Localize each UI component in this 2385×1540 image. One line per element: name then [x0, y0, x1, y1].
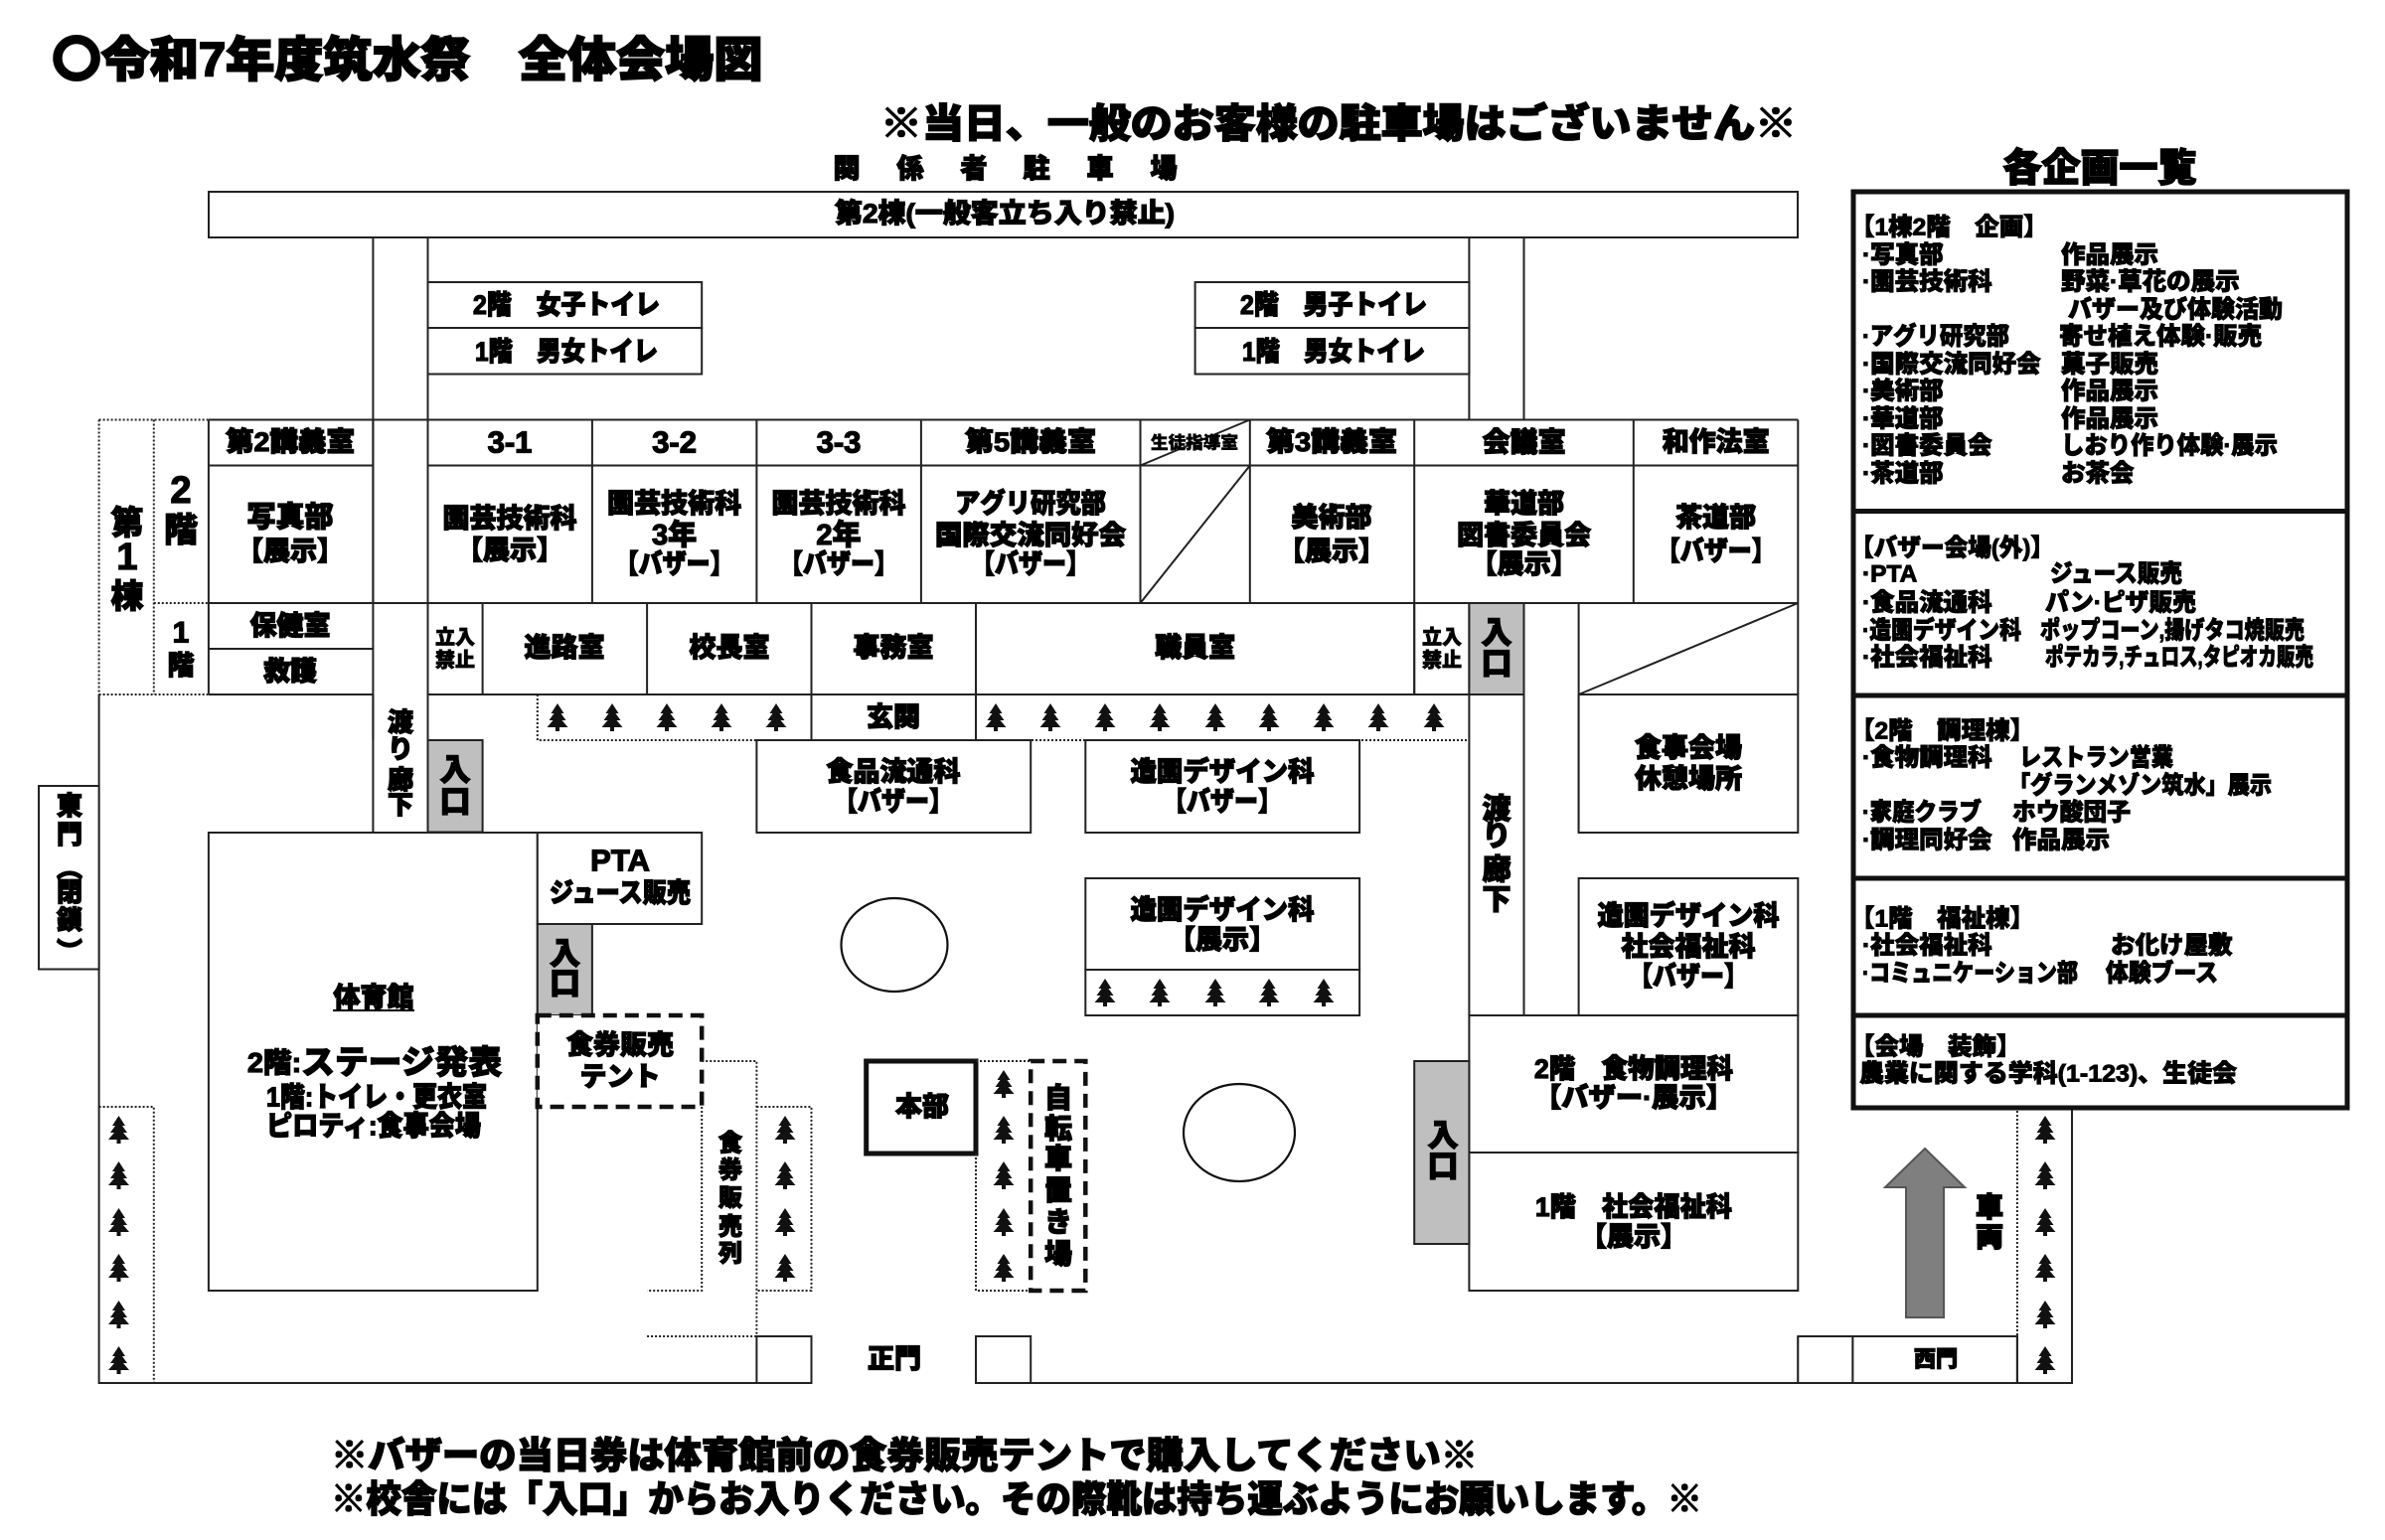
first floor rooms: 禁止 [435, 648, 475, 672]
dining area: 食事会場 [1635, 733, 1742, 763]
second floor rooms: 【バザー】 [971, 549, 1090, 579]
east gate: 東 [57, 791, 82, 821]
section: building 1 floor 2: ·国際交流同好会 [1862, 350, 2041, 378]
headquarters: 本部 [895, 1092, 949, 1122]
design and welfare bazaar: 【バザー】 [1629, 962, 1748, 992]
dining area: 休憩場所 [1635, 764, 1742, 794]
entrance: gym north: 入 [439, 753, 471, 787]
section: outdoor bazaar: ·PTA [1862, 560, 1918, 588]
trees near bicycle parking [976, 1061, 1031, 1291]
entrance: gym east: 入 [550, 936, 580, 972]
east gate: 鎖 [57, 905, 82, 935]
second floor rooms: 【展示】 [1278, 537, 1385, 566]
bicycle parking: き [1044, 1206, 1072, 1238]
second floor rooms: 【バザー】 [615, 549, 734, 579]
section: building 1 floor 2: ·アグリ研究部 [1862, 322, 2009, 350]
landscape design exhibit [1085, 878, 1359, 1015]
food distribution bazaar [756, 740, 1031, 833]
second floor rooms: 茶道部 [1675, 503, 1756, 533]
second floor rooms: 会議室 [1483, 427, 1566, 457]
vehicle label: 両 [1976, 1222, 2003, 1252]
vehicle label: 車 [1976, 1192, 2003, 1222]
building 1 outline labels: 1 [116, 537, 138, 578]
bicycle parking: 転 [1044, 1113, 1072, 1145]
section: cooking building: ホウ酸団子 [2012, 799, 2131, 827]
toilets left: 1階 男女トイレ [475, 337, 658, 367]
vehicle label [1976, 1192, 2003, 1252]
meal ticket tent: 食券販売 [566, 1030, 674, 1060]
ticket queue: 販 [718, 1184, 742, 1212]
building 1 outline labels: 第 [111, 505, 143, 540]
section: cooking building: ·家庭クラブ [1862, 797, 1982, 827]
food distribution bazaar: 【バザー】 [834, 787, 953, 817]
section: building 1 floor 2: 作品展示 [2061, 405, 2158, 433]
section: outdoor bazaar: ポップコーン,揚げタコ焼販売 [2040, 616, 2305, 644]
second floor rooms: 3-1 [488, 425, 532, 459]
gymnasium: 2階:ステージ発表 [247, 1043, 502, 1081]
site boundary [99, 694, 2072, 1383]
entrance: gym east [538, 924, 592, 1015]
entrance: gym east: 口 [550, 966, 580, 1001]
section: building 1 floor 2: しおり作り体験·展示 [2061, 431, 2278, 459]
section: welfare building: お化け屋敷 [2111, 930, 2233, 960]
second floor rooms: 華道部 [1484, 489, 1564, 519]
entrance: gym north [427, 740, 483, 833]
PTA booth: ジュース販売 [550, 878, 691, 908]
landscape design bazaar: 【バザー】 [1163, 787, 1282, 817]
section: welfare building: 【1階 福祉棟】 [1850, 904, 2034, 932]
first floor rooms: 保健室 [250, 611, 330, 641]
building 2: 第2棟(一般客立ち入り禁止) [835, 198, 1175, 229]
gymnasium: 体育館 [334, 983, 413, 1012]
bottom notes: ※校舎には「入口」からお入りください。その際靴は持ち運ぶようにお願いします。※ [331, 1478, 1702, 1520]
toilets right: 1階 男女トイレ [1242, 337, 1425, 367]
second floor rooms: 【展示】 [1471, 549, 1578, 579]
second floor rooms: 【展示】 [237, 537, 344, 566]
section: cooking building: 「グランメゾン筑水」展示 [2008, 771, 2272, 799]
staff parking label: 者 [960, 154, 988, 184]
second floor rooms: 図書委員会 [1457, 521, 1591, 550]
second floor rooms: 【バザー】 [1657, 537, 1776, 566]
second floor rooms: 第2講義室 [226, 426, 355, 457]
list heading: 各企画一覧 [2002, 147, 2197, 191]
bottom notes [331, 1435, 1702, 1520]
cooking building: 2階 食物調理科 [1534, 1054, 1733, 1084]
second floor rooms: アグリ研究部 [955, 488, 1106, 519]
welfare building: 1階 社会福祉科 [1535, 1192, 1732, 1222]
second floor rooms: 2年 [816, 519, 862, 551]
section: building 1 floor 2: 作品展示 [2061, 240, 2158, 268]
gymnasium [209, 833, 538, 1291]
section: cooking building: ·食物調理科 [1862, 743, 1992, 771]
section: building 1 floor 2: ·園芸技術科 [1862, 268, 1992, 296]
second floor rooms: 【バザー】 [779, 549, 898, 579]
second floor rooms: 園芸技術科 [443, 504, 576, 534]
headquarters [867, 1061, 976, 1154]
design and welfare bazaar: 社会福祉科 [1622, 932, 1755, 962]
west gate [1798, 1336, 2017, 1383]
section: welfare building [1850, 904, 2233, 988]
section: building 1 floor 2: 【1棟2階 企画】 [1850, 213, 2048, 240]
section: cooking building [1850, 717, 2272, 854]
bicycle parking: 置 [1044, 1174, 1072, 1206]
staff parking label: 駐 [1024, 153, 1049, 184]
building 1 outline labels: 1 [173, 616, 189, 650]
right walkway label [1482, 793, 1511, 916]
section: building 1 floor 2: バザー及び体験活動 [2068, 296, 2283, 324]
food distribution bazaar: 食品流通科 [827, 757, 960, 787]
parking notice: ※当日、一般のお客様の駐車場はございません※ [880, 101, 1797, 146]
bottom notes: ※バザーの当日券は体育館前の食券販売テントで購入してください※ [331, 1435, 1478, 1476]
entrance: cooking building: 口 [1427, 1149, 1459, 1184]
second floor rooms: 園芸技術科 [607, 489, 741, 519]
landscape design bazaar: 造園デザイン科 [1131, 756, 1314, 787]
fountain circle 2 [1184, 1084, 1295, 1181]
toilets right: 2階 男子トイレ [1240, 290, 1427, 320]
section: venue decoration [1850, 1033, 2238, 1087]
staff parking label: 係 [896, 154, 924, 184]
design and welfare bazaar: 造園デザイン科 [1598, 900, 1779, 931]
section: outdoor bazaar [1850, 535, 2313, 672]
gymnasium: ピロティ:食事会場 [266, 1111, 481, 1141]
staff parking label [833, 153, 1177, 184]
right walkway label: 渡 [1482, 793, 1511, 826]
landscape design exhibit: 【展示】 [1169, 925, 1276, 955]
east gate: ︶ [57, 937, 82, 967]
front trees and hall [538, 694, 1469, 740]
first floor rooms: 事務室 [853, 633, 934, 663]
section: building 1 floor 2: ·図書委員会 [1862, 431, 1992, 459]
section: building 1 floor 2 [1850, 213, 2283, 487]
section: outdoor bazaar: ジュース販売 [2050, 560, 2182, 588]
entrance: building 1 east: 入 [1481, 616, 1512, 650]
second floor rooms: 生徒指導室 [1151, 433, 1238, 453]
section: building 1 floor 2: ·華道部 [1862, 405, 1944, 433]
section: venue decoration: 農業に関する学科(1-123)、生徒会 [1859, 1059, 2238, 1087]
section: building 1 floor 2: ·茶道部 [1862, 459, 1944, 487]
map [39, 192, 2072, 1383]
ticket queue [647, 1061, 756, 1336]
building 1 outline labels: 2 [170, 470, 192, 512]
main gate [756, 1336, 1031, 1383]
title: 〇令和7年度筑水祭 全体会場図 [52, 34, 763, 87]
cooking building: 【バザー·展示】 [1534, 1083, 1733, 1113]
second floor rooms: 3年 [652, 519, 697, 551]
toilets right [1195, 282, 1469, 374]
section: building 1 floor 2: ·写真部 [1862, 240, 1944, 268]
second floor rooms: 園芸技術科 [771, 489, 906, 519]
section: building 1 floor 2: 菓子販売 [2061, 350, 2158, 378]
corridors to building 2 [373, 237, 1523, 740]
right walkway label: 下 [1482, 884, 1511, 916]
section: welfare building: ·社会福祉科 [1862, 932, 1992, 960]
meal ticket tent: テント [580, 1062, 660, 1092]
section: outdoor bazaar: パン·ピザ販売 [2045, 588, 2196, 616]
meal ticket tent [538, 1015, 702, 1107]
entrance: building 1 east: 口 [1481, 646, 1512, 682]
section: outdoor bazaar: ·社会福祉科 [1862, 644, 1992, 672]
first floor rooms: 立入 [1422, 625, 1462, 649]
section: building 1 floor 2: 作品展示 [2061, 378, 2158, 405]
ticket queue: 券 [718, 1156, 742, 1184]
section: building 1 floor 2: お茶会 [2061, 459, 2135, 487]
first floor rooms: 禁止 [1422, 648, 1462, 672]
ticket queue: 列 [718, 1240, 742, 1268]
east gate: 門 [57, 820, 82, 849]
entrance: cooking building: 入 [1427, 1119, 1459, 1153]
second floor rooms: 写真部 [246, 501, 334, 534]
left walkway: 下 [388, 790, 413, 820]
section: outdoor bazaar: ·食品流通科 [1862, 588, 1992, 616]
PTA booth: PTA [590, 843, 650, 878]
section: outdoor bazaar: 【バザー会場(外)】 [1850, 535, 2054, 562]
section: cooking building: ·調理同好会 [1862, 827, 1992, 854]
panel: event list [1850, 192, 2347, 1108]
second floor rooms: 3-3 [817, 425, 861, 459]
building 2 [209, 192, 1798, 237]
trees beside queue [756, 1107, 811, 1291]
section: building 1 floor 2: 寄せ植え体験·販売 [2059, 322, 2262, 350]
landscape design bazaar [1085, 740, 1359, 833]
building 1 outline labels: 階 [164, 512, 198, 549]
building 1 outline labels: 棟 [111, 578, 143, 614]
section: venue decoration: 【会場 装飾】 [1850, 1033, 2021, 1061]
second floor rooms: 国際交流同好会 [935, 521, 1126, 550]
left walkway: 廊 [388, 765, 413, 795]
right walkway label: り [1482, 821, 1511, 852]
building 1 outline labels [99, 419, 209, 694]
PTA booth [538, 833, 702, 924]
second floor rooms [209, 419, 1798, 694]
section: welfare building: ·コミュニケーション部 [1862, 960, 2078, 988]
second floor rooms: 美術部 [1292, 503, 1371, 533]
ticket queue: 売 [718, 1214, 742, 1240]
first floor rooms: 校長室 [690, 633, 769, 663]
left walkway [373, 694, 427, 833]
front trees and hall: 玄関 [867, 702, 920, 732]
section: cooking building: 【2階 調理棟】 [1850, 717, 2034, 745]
east gate: ︵ [57, 853, 82, 883]
left walkway: り [388, 734, 413, 764]
fountain circle 1 [841, 898, 948, 992]
second floor rooms: 第5講義室 [965, 426, 1096, 457]
staff parking label: 場 [1151, 154, 1177, 184]
arrow: vehicle direction [1885, 1149, 1965, 1317]
section: building 1 floor 2: 野菜·草花の展示 [2061, 268, 2240, 296]
entrance: building 1 east [1469, 603, 1524, 694]
design and welfare bazaar [1579, 878, 1798, 1015]
toilets left [427, 282, 702, 374]
section: welfare building: 体験ブース [2106, 958, 2218, 988]
entrance: gym north: 口 [439, 785, 471, 819]
first floor rooms: 進路室 [525, 633, 604, 663]
staff parking label: 車 [1087, 154, 1113, 184]
gymnasium: 1階:トイレ・更衣室 [266, 1081, 487, 1113]
ticket queue: 食 [718, 1131, 742, 1156]
landscape design exhibit: 造園デザイン科 [1131, 894, 1314, 925]
first floor rooms: 職員室 [1155, 633, 1235, 663]
section: outdoor bazaar: ·造園デザイン科 [1862, 616, 2021, 644]
second floor rooms: 和作法室 [1663, 427, 1770, 457]
second floor rooms: 第3講義室 [1266, 426, 1397, 457]
first floor rooms: 救護 [263, 657, 317, 687]
west gate: 西門 [1914, 1347, 1958, 1371]
east gate [39, 786, 99, 970]
east gate: 閉 [57, 877, 82, 907]
right tree row [2017, 1107, 2055, 1383]
building 1 outline labels: 階 [167, 651, 195, 681]
toilets left: 2階 女子トイレ [473, 290, 660, 320]
left walkway: 渡 [388, 707, 413, 737]
bicycle parking: 車 [1044, 1143, 1072, 1174]
bicycle parking: 場 [1044, 1238, 1072, 1270]
bicycle parking: 自 [1044, 1083, 1072, 1113]
section: building 1 floor 2: ·美術部 [1862, 378, 1944, 405]
left tree row [99, 1107, 154, 1383]
welfare building: 【展示】 [1580, 1222, 1687, 1252]
section: cooking building: レストラン営業 [2019, 743, 2173, 771]
right walkway label: 廊 [1482, 853, 1511, 886]
staff parking label: 関 [833, 154, 861, 184]
first floor rooms: 立入 [435, 625, 475, 649]
section: cooking building: 作品展示 [2012, 827, 2110, 854]
bicycle parking [1031, 1061, 1085, 1291]
entrance: cooking building [1414, 1061, 1469, 1244]
first floor rooms [209, 603, 1798, 1015]
main gate: 正門 [868, 1344, 921, 1374]
dining area [1579, 694, 1798, 833]
cooking building [1469, 1015, 1798, 1153]
second floor rooms: 3-2 [652, 425, 697, 459]
welfare building [1469, 1153, 1798, 1291]
second floor rooms: 【展示】 [456, 536, 563, 565]
